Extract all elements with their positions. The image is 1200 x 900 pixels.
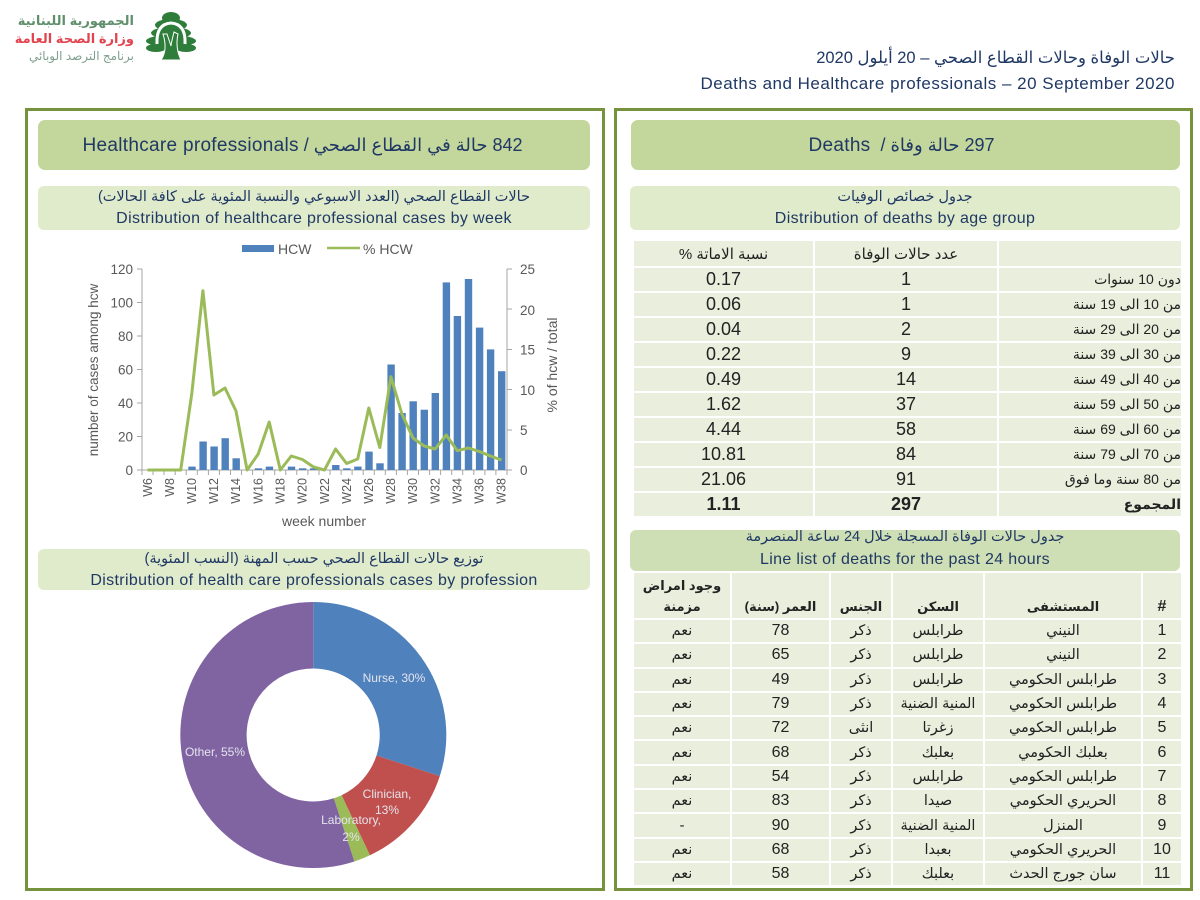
table: deaths by age group: 0.22 (706, 344, 741, 364)
logo text: ministry name: الجمهورية اللبنانية (18, 13, 134, 28)
table: deaths by age group (632, 239, 1183, 518)
table: line list of deaths: نعم (672, 866, 692, 882)
slice: laboratory (334, 795, 370, 862)
table: line list of deaths: زغرتا (922, 720, 954, 736)
table: line list of deaths: 65 (772, 646, 789, 663)
donut labels: Other, 55% (185, 745, 245, 759)
week labels: W20 (296, 478, 310, 504)
table: line list of deaths: طرابلس الحكومي (1009, 672, 1117, 688)
axis titles: % of hcw / total (544, 318, 560, 412)
bars: HCW cases (188, 279, 505, 470)
table: line list of deaths: ذكر (850, 696, 872, 712)
heading: weekly distribution: حالات القطاع الصحي (العدد الاسبوعي والنسبة المئوية على كافة الحالات) (98, 189, 530, 205)
table: line list of deaths: بعبدا (924, 842, 952, 858)
legend (242, 241, 414, 257)
table: deaths by age group: 1 (901, 269, 911, 289)
table: deaths by age group: 0.49 (706, 369, 741, 389)
table: deaths by age group: من 40 الى 49 سنة (1073, 371, 1181, 387)
panel: healthcare professionals (25, 108, 605, 891)
table: line list of deaths: ذكر (850, 866, 872, 882)
table: deaths by age group: المجموع (1124, 496, 1181, 512)
slice: nurse (313, 602, 446, 776)
right axis labels: 5 (520, 423, 528, 438)
table: line list of deaths: طرابلس الحكومي (1009, 720, 1117, 736)
table: line list of deaths: العمر (سنة) (745, 599, 816, 614)
donut chart: cases by profession (180, 602, 446, 868)
table: line list of deaths: 83 (772, 792, 789, 809)
table: line list of deaths: المستشفى (1027, 599, 1099, 614)
right axis labels: 25 (520, 262, 535, 277)
slice: other (180, 602, 354, 868)
table: deaths by age group: 4.44 (706, 419, 741, 439)
table: line list of deaths: الحريري الحكومي (1010, 842, 1116, 858)
table: line list of deaths: ذكر (850, 623, 872, 639)
logo text: ministry name: وزارة الصحة العامة (15, 31, 134, 46)
week labels (141, 478, 508, 504)
combo chart: HCW cases by week (86, 241, 560, 529)
table: deaths by age group: من 50 الى 59 سنة (1073, 396, 1181, 412)
table: deaths by age group: من 80 سنة وما فوق (1065, 471, 1181, 487)
right axis labels: 20 (520, 303, 535, 318)
donut labels: Laboratory, (321, 813, 381, 827)
table: deaths by age group: من 10 الى 19 سنة (1073, 296, 1181, 312)
table: deaths by age group: 21.06 (701, 469, 746, 489)
table: line list of deaths: طرابلس (913, 623, 963, 639)
heading: deaths by age group: جدول خصائص الوفيات (837, 189, 973, 205)
axes (137, 269, 512, 475)
table: line list of deaths: 72 (772, 719, 789, 736)
table: line list of deaths: نعم (672, 623, 692, 639)
table: deaths by age group: 84 (896, 444, 916, 464)
table: line list of deaths: 68 (772, 841, 789, 858)
table: line list of deaths: 7 (1158, 768, 1166, 785)
table: deaths by age group: 9 (901, 344, 911, 364)
table: line list of deaths: ذكر (850, 842, 872, 858)
table: line list of deaths: الجنس (840, 599, 882, 614)
table: deaths by age group: 37 (896, 394, 916, 414)
table: line list of deaths: 1 (1158, 622, 1166, 639)
table: deaths by age group: 14 (896, 369, 916, 389)
week labels: W6 (141, 478, 155, 497)
panel: deaths (614, 108, 1193, 891)
axis titles (86, 283, 560, 529)
table: line list of deaths: النيني (1046, 647, 1080, 663)
week labels: W38 (494, 478, 508, 504)
week labels: W8 (163, 478, 177, 497)
week labels: W10 (185, 478, 199, 504)
table: deaths by age group: من 20 الى 29 سنة (1073, 321, 1181, 337)
table: line list of deaths: الحريري الحكومي (1010, 793, 1116, 809)
table: line list of deaths: نعم (672, 696, 692, 712)
table: line list of deaths: طرابلس الحكومي (1009, 769, 1117, 785)
donut labels: 13% (375, 803, 399, 817)
table: line list of deaths: طرابلس (913, 672, 963, 688)
table: line list of deaths: # (1158, 598, 1166, 615)
left axis labels: 20 (118, 430, 133, 444)
table: deaths by age group: 1.11 (706, 494, 741, 514)
table: line list of deaths: طرابلس الحكومي (1009, 696, 1117, 712)
table: line list of deaths (632, 571, 1183, 887)
table: line list of deaths: 68 (772, 744, 789, 761)
heading: distribution by profession (38, 549, 590, 590)
table: deaths by age group: 58 (896, 419, 916, 439)
week labels: W26 (362, 478, 376, 504)
donut labels: 2% (342, 830, 360, 844)
heading: deaths by age group: Distribution of deaths by age group (775, 210, 1035, 227)
table: line list of deaths: نعم (672, 793, 692, 809)
table: deaths by age group: 1 (901, 294, 911, 314)
left axis labels: 80 (118, 329, 133, 344)
table: line list of deaths: طرابلس (913, 769, 963, 785)
line: percent HCW (148, 291, 502, 470)
table: deaths by age group: عدد حالات الوفاة (854, 246, 958, 262)
title: report heading: Deaths and Healthcare professionals – 20 September 2020 (700, 74, 1175, 93)
table: line list of deaths: 11 (1154, 865, 1170, 882)
heading: deaths total: 297 حالة وفاة / Deaths (808, 135, 995, 156)
table: line list of deaths: بعلبك الحكومي (1018, 745, 1108, 761)
table: line list of deaths: النيني (1046, 623, 1080, 639)
table: line list of deaths: سان جورج الحدث (1009, 866, 1117, 882)
table: line list of deaths: 49 (772, 671, 789, 688)
heading: distribution by profession: توزيع حالات القطاع الصحي حسب المهنة (النسب المئوية) (145, 551, 483, 567)
table: line list of deaths: المنية الضنية (901, 696, 975, 712)
left axis labels: 0 (125, 463, 133, 478)
table: deaths by age group: من 70 الى 79 سنة (1073, 446, 1181, 462)
table: line list of deaths: 5 (1158, 719, 1166, 736)
table: line list of deaths: 6 (1158, 744, 1166, 761)
table: line list of deaths: 4 (1158, 695, 1166, 712)
table: line list of deaths: بعلبك (922, 866, 954, 882)
table: line list of deaths: طرابلس (913, 647, 963, 663)
table: deaths by age group: من 60 الى 69 سنة (1073, 421, 1181, 437)
week labels: W16 (252, 478, 266, 504)
table: deaths by age group: 1.62 (706, 394, 741, 414)
left axis labels (110, 262, 133, 478)
week labels: W18 (274, 478, 288, 504)
table: line list of deaths: ذكر (850, 745, 872, 761)
table: line list of deaths: ذكر (850, 818, 872, 834)
icon: cedar tree (146, 12, 196, 60)
week labels: W24 (340, 478, 354, 504)
table: line list of deaths: 3 (1158, 671, 1166, 688)
table: deaths by age group: دون 10 سنوات (1094, 271, 1181, 287)
heading: deaths by age group (630, 186, 1180, 230)
left axis labels: 100 (110, 296, 133, 310)
left axis labels: 120 (110, 262, 133, 277)
legend: % HCW (363, 241, 414, 257)
week labels: W28 (384, 478, 398, 504)
table: line list of deaths: 8 (1158, 792, 1166, 809)
heading: line list of deaths: جدول حالات الوفاة المسجلة خلال 24 ساعة المنصرمة (746, 529, 1064, 545)
table: line list of deaths: انثى (849, 720, 873, 736)
donut labels: Nurse, 30% (363, 671, 426, 685)
week labels: W36 (472, 478, 486, 504)
table: line list of deaths: 79 (772, 695, 789, 712)
heading: healthcare professionals total: 842 حالة في القطاع الصحي / Healthcare professionals (82, 135, 523, 156)
right axis labels (520, 262, 535, 478)
week labels: W12 (207, 478, 221, 504)
week labels: W14 (229, 478, 243, 504)
logo: ministry of public health (15, 12, 196, 63)
logo text: ministry name: برنامج الترصد الوبائي (29, 49, 134, 63)
table: line list of deaths: ذكر (850, 769, 872, 785)
table: line list of deaths: نعم (672, 769, 692, 785)
table: line list of deaths: نعم (672, 672, 692, 688)
heading: distribution by profession: Distribution of health care professionals cases by profession (90, 572, 538, 589)
table: deaths by age group: 2 (901, 319, 911, 339)
heading: weekly distribution (38, 186, 590, 230)
legend: HCW (278, 241, 312, 257)
axis titles: week number (281, 513, 366, 529)
table: line list of deaths: 54 (772, 768, 789, 785)
table: deaths by age group: 0.04 (706, 319, 741, 339)
heading: healthcare professionals total (38, 120, 590, 170)
table: line list of deaths: ذكر (850, 793, 872, 809)
logo text: ministry name (15, 13, 134, 63)
table: deaths by age group: من 30 الى 39 سنة (1073, 346, 1181, 362)
table: deaths by age group: نسبة الاماتة % (679, 246, 768, 262)
table: line list of deaths: 9 (1158, 817, 1166, 834)
table: line list of deaths: المنية الضنية (901, 818, 975, 834)
table: deaths by age group: 0.17 (706, 269, 741, 289)
week labels: W32 (428, 478, 442, 504)
week labels: W30 (406, 478, 420, 504)
table: line list of deaths: 78 (772, 622, 789, 639)
table: deaths by age group: 10.81 (701, 444, 746, 464)
table: deaths by age group: 297 (891, 494, 921, 514)
week labels: W34 (450, 478, 464, 504)
table: line list of deaths: نعم (672, 647, 692, 663)
table: deaths by age group: 0.06 (706, 294, 741, 314)
table: line list of deaths: ذكر (850, 672, 872, 688)
left axis labels: 40 (118, 396, 133, 411)
heading: deaths total (631, 120, 1180, 170)
table: line list of deaths: نعم (672, 745, 692, 761)
table: line list of deaths: 58 (772, 865, 789, 882)
week labels: W22 (318, 478, 332, 504)
heading: weekly distribution: Distribution of healthcare professional cases by week (116, 210, 512, 227)
left axis labels: 60 (118, 362, 133, 378)
right axis labels: 10 (520, 383, 535, 398)
table: line list of deaths: وجود امراض مزمنة (643, 578, 721, 614)
heading: line list of deaths: Line list of deaths for the past 24 hours (760, 551, 1050, 568)
table: line list of deaths: نعم (672, 720, 692, 736)
title: report heading: حالات الوفاة وحالات القطاع الصحي – 20 أيلول 2020 (816, 49, 1175, 67)
title: report heading (700, 46, 1175, 93)
table: line list of deaths: بعلبك (922, 745, 954, 761)
table: deaths by age group: 91 (896, 469, 916, 489)
heading: line list of deaths (630, 530, 1180, 571)
slice: clinician (342, 756, 440, 855)
table: line list of deaths: ذكر (850, 647, 872, 663)
table: line list of deaths: - (680, 818, 684, 834)
table: line list of deaths: السكن (917, 599, 959, 614)
table: line list of deaths: 90 (772, 817, 789, 834)
table: line list of deaths: المنزل (1043, 818, 1083, 834)
right axis labels: 15 (520, 342, 535, 358)
table: line list of deaths: صيدا (924, 793, 952, 809)
table: line list of deaths: 10 (1153, 841, 1171, 858)
axis titles: number of cases among hcw (86, 283, 101, 456)
donut labels (185, 671, 426, 844)
donut labels: Clinician, (363, 787, 411, 801)
table: line list of deaths: نعم (672, 842, 692, 858)
table: line list of deaths: 2 (1158, 646, 1166, 663)
right axis labels: 0 (520, 463, 528, 478)
